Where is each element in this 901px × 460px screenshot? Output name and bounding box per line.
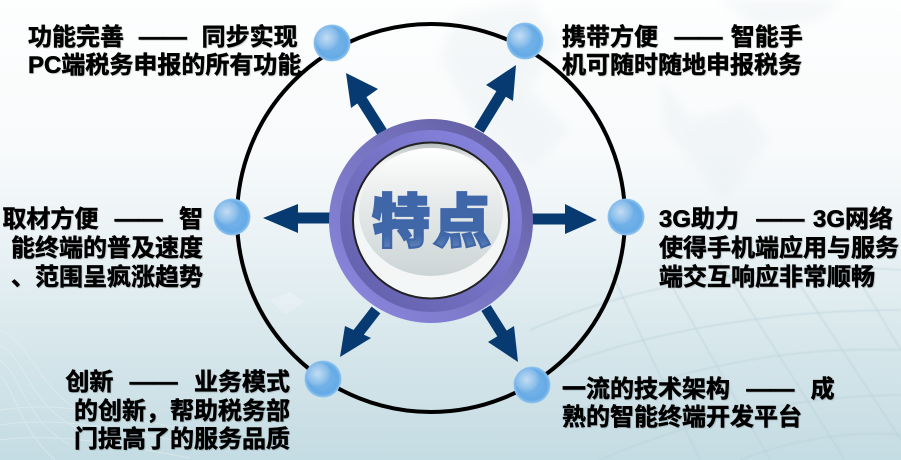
text: right feature: 使得手机端应用与服务 (659, 235, 899, 262)
arrow: left (296, 212, 330, 224)
text: bottom left feature: 的创新，帮助税务部 (74, 398, 290, 425)
node: bottom left (304, 360, 342, 398)
text: top left feature: 功能完善 —— 同步实现 (28, 24, 298, 51)
node: left (214, 198, 250, 236)
text: right feature: 3G助力 —— 3G网络 (659, 206, 893, 233)
text: top left feature: PC端税务申报的所有功能 (28, 52, 301, 79)
text: bottom right feature: 熟的智能终端开发平台 (562, 404, 802, 431)
node: top left (314, 24, 350, 62)
text: left feature (2, 206, 204, 291)
node: right (608, 198, 644, 236)
text: top right feature: 机可随时随地申报税务 (562, 52, 802, 79)
arrow: top right (479, 86, 506, 130)
arrow: bottom left (352, 310, 376, 341)
arrow: bottom right (486, 308, 508, 343)
text: bottom left feature: 门提高了的服务品质 (74, 426, 290, 453)
text: left feature: 取材方便 —— 智 (2, 206, 203, 233)
text: bottom right feature (562, 376, 835, 431)
text: right feature (659, 206, 900, 291)
text: bottom left feature (65, 369, 291, 453)
text: top right feature (562, 24, 804, 79)
centre label: 特点 (372, 190, 494, 255)
arrow: top left (356, 91, 382, 132)
centre badge (329, 119, 533, 323)
outer ring (237, 24, 625, 412)
node: bottom right (514, 366, 550, 404)
text: bottom right feature: 一流的技术架构 —— 成 (562, 376, 835, 403)
text: bottom left feature: 创新 —— 业务模式 (65, 369, 290, 396)
text: left feature: 能终端的普及速度 (11, 235, 203, 262)
text: top left feature (28, 24, 302, 79)
text: left feature: 、范围呈疯涨趋势 (11, 264, 203, 291)
node: top right (506, 22, 544, 60)
arrow: right (532, 214, 567, 224)
text: top right feature: 携带方便 —— 智能手 (562, 24, 803, 51)
text: right feature: 端交互响应非常顺畅 (659, 264, 875, 291)
